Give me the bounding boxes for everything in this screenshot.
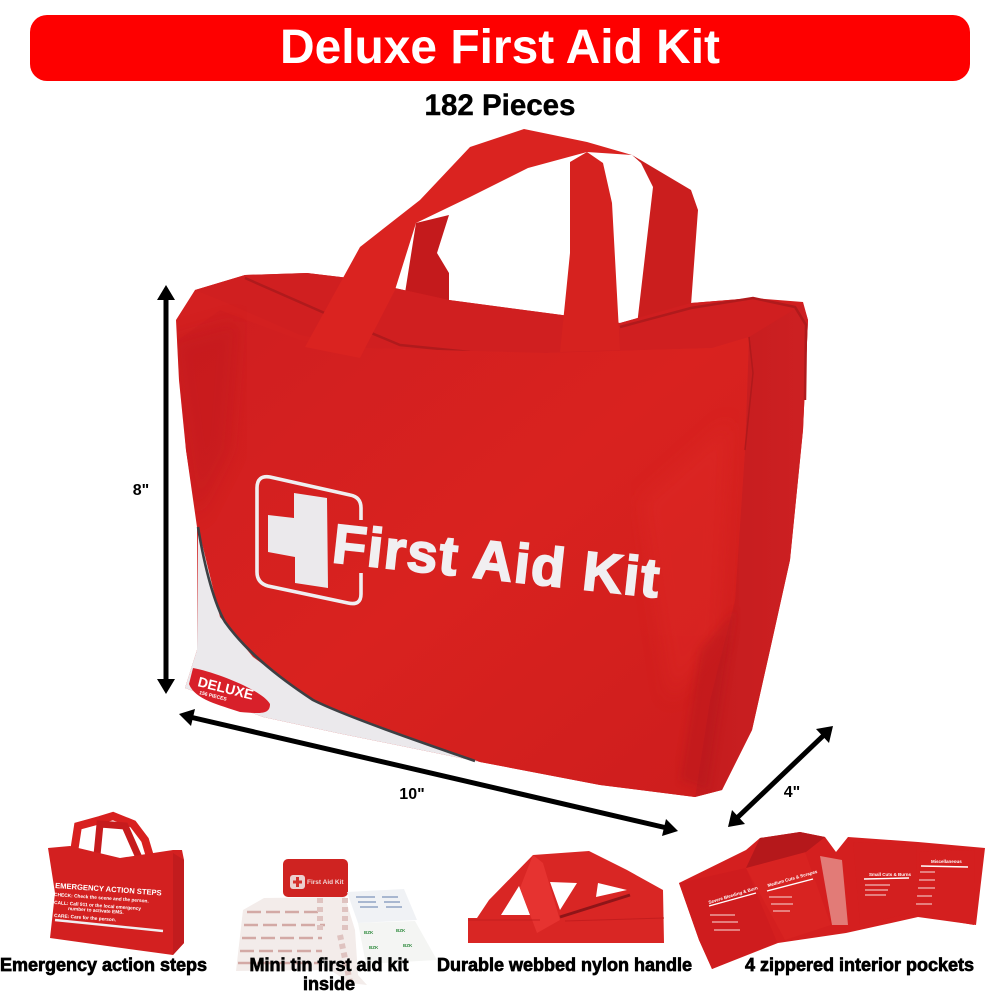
arrow: depth 4 inches: [728, 726, 833, 827]
front panel: [178, 310, 749, 797]
tin: First Aid Kit: [307, 879, 344, 886]
first aid logo box with cross: [257, 477, 361, 604]
arrow: height 8 inches: [157, 285, 175, 694]
wipes: BZK: [396, 928, 406, 933]
thumbnail: open kit with pockets: [679, 832, 985, 969]
top panel and zipper: [195, 273, 806, 400]
depth label: 4": [784, 784, 800, 801]
main product: first aid bag: [170, 129, 808, 797]
caption: interior pockets: 4 zippered interior pockets: [745, 955, 974, 975]
caption: emergency action steps: Emergency action steps: [0, 955, 207, 975]
pocket labels: Miscellaneous: [931, 859, 962, 864]
deluxe badge: 156 PIECES: [199, 690, 228, 703]
caption: webbed nylon handle: Durable webbed nylon handle: [437, 955, 692, 975]
deluxe badge: [189, 668, 270, 713]
bandages: [236, 897, 367, 985]
title banner: [30, 15, 970, 81]
white corner swoosh: [185, 527, 480, 762]
thumbnail: emergency action steps bag: CALL: Call 911 or the local emergency: [54, 900, 142, 912]
wipes: BZK: [403, 943, 413, 948]
height label: 8": [133, 482, 149, 499]
pocket labels: Medium Cuts & Scrapes: [767, 869, 818, 888]
thumbnail: emergency action steps bag: CARE: Care for the person.: [54, 913, 116, 923]
arrow: width 10 inches: [179, 709, 678, 836]
pocket labels: Small Cuts & Burns: [869, 872, 912, 877]
thumbnail: emergency action steps bag: number to activate EMS.: [68, 906, 124, 916]
thumbnail: webbed nylon handle: [468, 851, 664, 943]
thumbnail: emergency action steps bag: EMERGENCY ACTION STEPS: [55, 881, 162, 897]
subtitle: piece count: 182 Pieces: [425, 89, 575, 122]
thumbnail: emergency action steps bag: CHECK: Check the scene and the person.: [54, 892, 149, 905]
tin: [283, 859, 348, 897]
caption: mini tin first aid kit: Mini tin first aid kit: [249, 955, 409, 975]
caption: mini tin first aid kit: [249, 955, 409, 994]
caption: mini tin first aid kit: inside: [303, 974, 355, 994]
fabric shading: [170, 320, 753, 790]
front handle: [305, 129, 632, 358]
pocket labels: Severe Bleeding & Burn: [708, 885, 759, 905]
title banner: Deluxe First Aid Kit: [280, 21, 720, 74]
thumbnail: emergency action steps bag: [48, 816, 184, 955]
deluxe badge: DELUXE: [196, 673, 255, 703]
right gusset: [695, 304, 808, 797]
width label: 10": [399, 786, 425, 803]
bag label text: First Aid Kit: [330, 512, 662, 609]
bag body: [176, 273, 808, 797]
back handles: [405, 155, 698, 325]
pocket panels: [679, 832, 975, 969]
wipes: [347, 889, 437, 964]
thumbnail: mini tin and supplies: [236, 859, 437, 985]
wipes: BZK: [369, 945, 379, 950]
pocket labels: [708, 859, 962, 905]
wipes: BZK: [364, 930, 374, 935]
